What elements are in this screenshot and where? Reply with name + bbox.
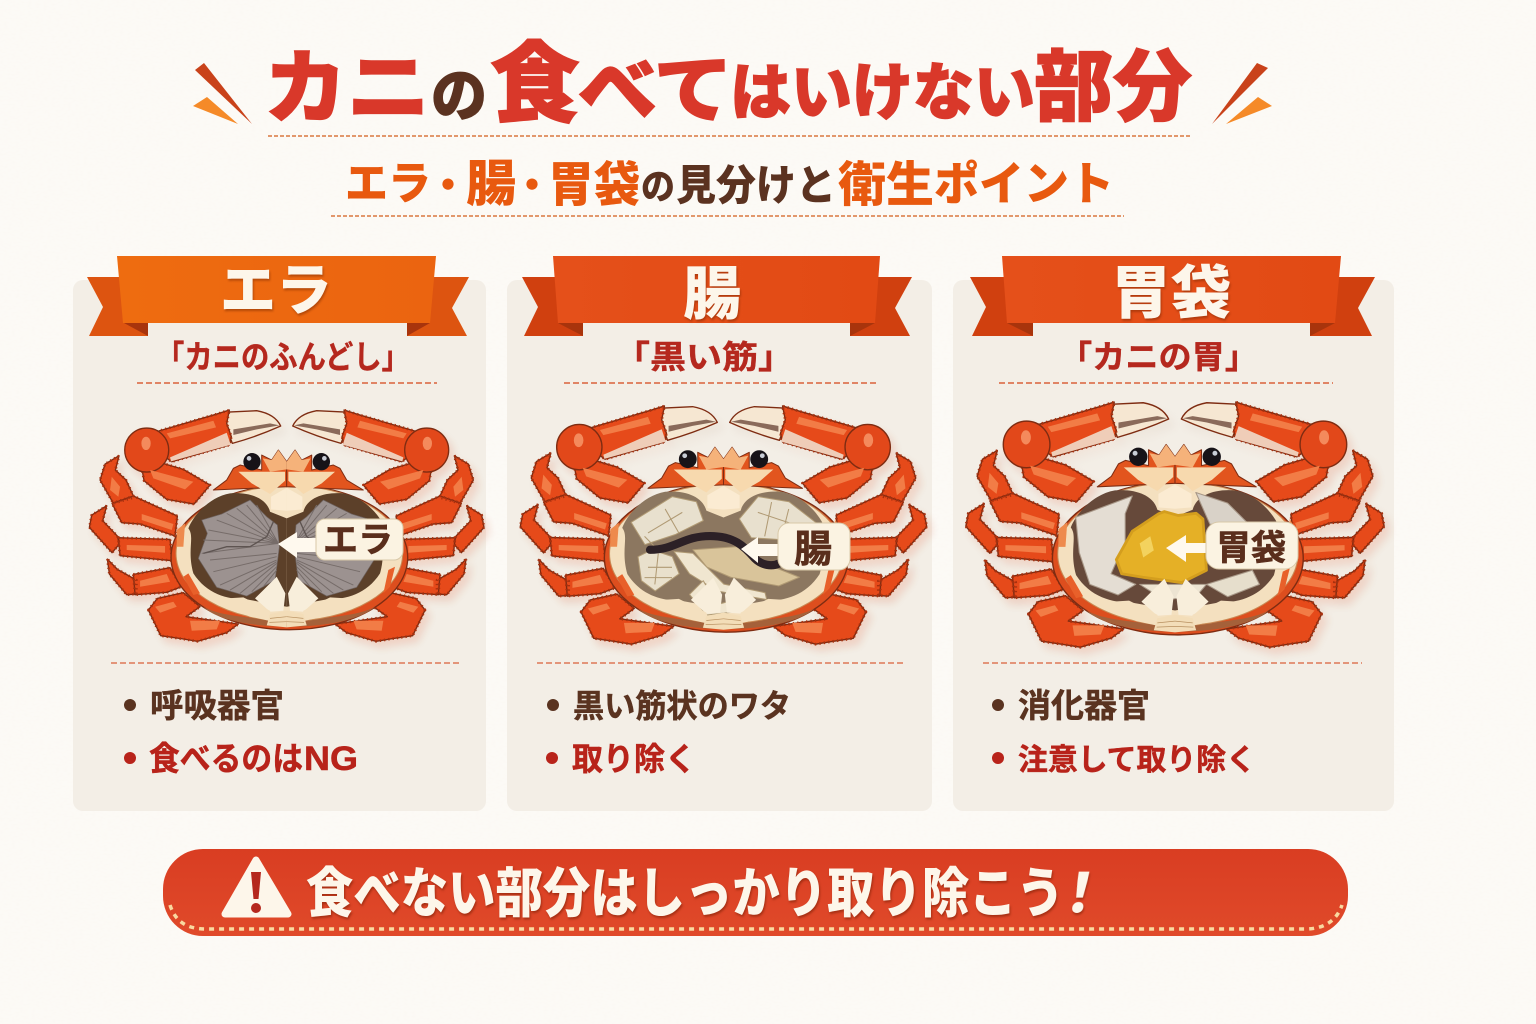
title: [264, 35, 1192, 134]
crab: stomach: [966, 402, 1389, 654]
title sparks right: [1212, 63, 1272, 124]
banner: 腸: [522, 256, 912, 336]
crab: intestine: [520, 406, 932, 650]
label: 胃袋: 胃袋: [1216, 529, 1286, 568]
bullets: [124, 687, 358, 778]
banner: 胃袋: 胃袋: [1111, 261, 1231, 326]
subtitle: 胃袋: [548, 159, 640, 212]
panel: 胃袋: [953, 256, 1394, 811]
banner: エラ: エラ: [220, 259, 332, 322]
panel: エラ: [73, 256, 489, 811]
subtitle: ポイント: [934, 158, 1114, 210]
title: カニ: [264, 44, 430, 133]
bottom warning banner: [163, 849, 1348, 936]
subtitle: ・: [512, 164, 552, 208]
bullets: [546, 688, 791, 777]
bullets: 消化器官: [1018, 687, 1150, 724]
icon: warning triangle: [225, 860, 288, 914]
label: エラ: エラ: [323, 521, 393, 560]
bullets: 食べるのは: [149, 740, 303, 777]
label: 胃袋: [1166, 522, 1298, 569]
title sparks left: [193, 63, 252, 124]
subtitle: 腸: [466, 156, 516, 212]
panel: 腸: [507, 256, 932, 811]
subtitle: [345, 156, 1114, 212]
banner: エラ: [87, 256, 469, 336]
label: 腸: 腸: [794, 529, 832, 571]
banner: 胃袋: [970, 256, 1375, 336]
crab: gills: [89, 410, 489, 647]
bullets: 取り除く: [572, 741, 696, 777]
warning text: 食べない部分はしっかり取り除こう: [306, 864, 1064, 924]
bullets: 注意して取り除く: [1018, 744, 1256, 777]
subheading: カニのふんどし: 「カニのふんどし」: [156, 339, 410, 375]
subtitle: 衛生: [838, 159, 934, 212]
subheading: カニの胃: 「カニの胃」: [1059, 339, 1258, 375]
bullets: 呼吸器官: [150, 687, 284, 724]
title: の: [431, 64, 487, 129]
warning text: ！: [1048, 863, 1113, 924]
subtitle: 見分けと: [676, 162, 836, 209]
label: エラ: [278, 519, 403, 560]
title: べて: [578, 49, 733, 132]
bullets: [992, 687, 1256, 777]
title: 食: [490, 35, 580, 134]
bullets: 黒い筋状のワタ: [573, 688, 791, 724]
subtitle: エラ: [345, 158, 431, 209]
subtitle: ・: [428, 164, 468, 208]
subheading: 黒い筋: 「黒い筋」: [614, 339, 794, 375]
banner: 腸: 腸: [683, 262, 741, 327]
bullets: NG: [304, 740, 358, 778]
title: 部分: [1034, 43, 1192, 131]
title: はいけない: [730, 59, 1035, 128]
subtitle: の: [641, 166, 675, 207]
label: 腸: [741, 523, 850, 571]
